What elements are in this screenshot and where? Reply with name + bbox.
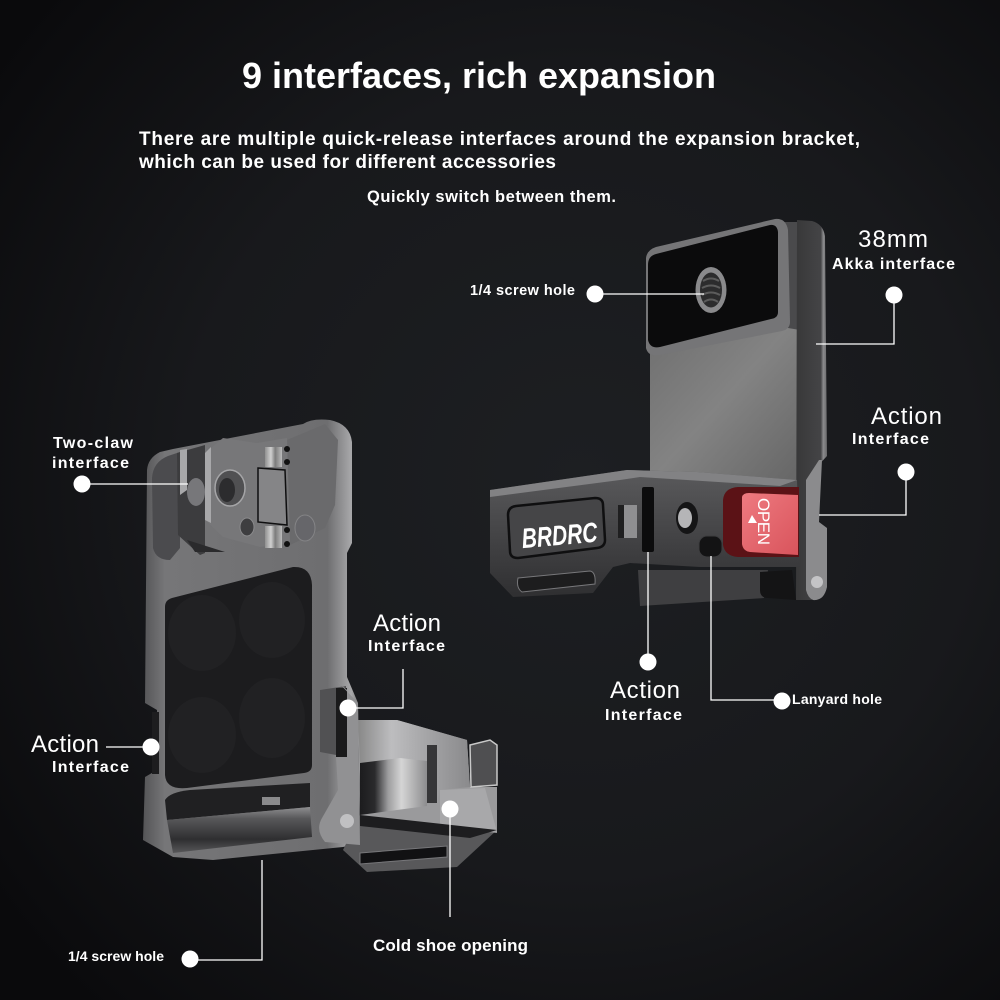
hex bolt bbox=[676, 502, 698, 534]
rail lower flange bbox=[806, 460, 827, 600]
callout: 38mm Akka interface bbox=[816, 226, 955, 344]
callout: Action Interface, left bbox=[31, 731, 160, 776]
callout: 1/4 screw hole, top: 1/4 screw hole bbox=[470, 283, 575, 299]
callout: Lanyard hole bbox=[711, 556, 882, 710]
right rail bbox=[796, 220, 827, 600]
callout: Action Interface, clamp: Interface bbox=[605, 707, 682, 724]
product: bracket rear view, right bbox=[490, 219, 827, 606]
callout: 38mm Akka interface: 38mm bbox=[858, 226, 928, 253]
callout: Action Interface, right: Interface bbox=[852, 431, 929, 448]
callout: Action Interface, middle: Interface bbox=[368, 638, 445, 655]
callout: Action Interface, left: Interface bbox=[52, 759, 129, 776]
clamp top edge bbox=[490, 470, 797, 497]
callout: Cold shoe opening bbox=[373, 800, 528, 955]
callout: Action Interface, middle bbox=[340, 610, 445, 716]
callout: Action Interface, right: Action bbox=[871, 403, 942, 430]
intro text bbox=[138, 129, 860, 206]
callout: 1/4 screw hole, bottom: 1/4 screw hole bbox=[68, 948, 164, 964]
callout: Two-claw interface: Two-claw bbox=[53, 435, 134, 452]
screw hole bbox=[696, 267, 726, 313]
callout: Two-claw interface bbox=[52, 435, 188, 492]
callout: 1/4 screw hole, top bbox=[470, 283, 704, 302]
intro text: There are multiple quick-release interfaces around the expansion bracket, bbox=[139, 129, 860, 150]
product: bracket front view, left bbox=[143, 420, 497, 872]
pivot pin bbox=[811, 576, 823, 588]
intro text: Quickly switch between them. bbox=[367, 188, 616, 206]
dark frame edge beside plate bbox=[778, 222, 800, 330]
black plate bbox=[648, 225, 778, 347]
hinge bbox=[258, 468, 287, 525]
clamp slots bbox=[518, 571, 595, 592]
callout: Cold shoe opening: Cold shoe opening bbox=[373, 936, 528, 955]
callout: Action Interface, right bbox=[819, 403, 942, 515]
title: 9 interfaces, rich expansion bbox=[242, 55, 716, 96]
grey body plate bbox=[650, 318, 797, 482]
upper cutout shading bbox=[152, 452, 180, 560]
clamp body bbox=[490, 470, 800, 597]
callout: Action Interface, clamp: Action bbox=[610, 677, 680, 704]
callout: 38mm Akka interface: Akka interface bbox=[832, 256, 955, 273]
lower base block bbox=[638, 570, 768, 606]
red OPEN latch bbox=[723, 487, 799, 557]
black plate frame bbox=[646, 219, 790, 355]
callout: Action Interface, middle: Action bbox=[373, 610, 441, 637]
lanyard hole bbox=[699, 536, 722, 557]
right notch, action interface bbox=[320, 686, 347, 757]
callout: Lanyard hole: Lanyard hole bbox=[792, 691, 882, 707]
pivot lobe bbox=[319, 680, 360, 845]
main frame bbox=[143, 420, 360, 860]
red OPEN latch: OPEN bbox=[754, 498, 773, 545]
callout: Two-claw interface: interface bbox=[52, 455, 129, 472]
lower cylinder bbox=[165, 783, 312, 853]
left notch bbox=[152, 712, 159, 774]
two-claw mount bbox=[177, 438, 315, 555]
lower shoe clamp bbox=[343, 815, 497, 872]
intro text: which can be used for different accessories bbox=[138, 152, 556, 173]
callout: Action Interface, left: Action bbox=[31, 731, 99, 758]
BRDRC logo plate bbox=[508, 498, 605, 558]
dark lens panel bbox=[165, 567, 312, 788]
callout: 1/4 screw hole, bottom bbox=[68, 860, 262, 968]
callout: Action Interface, clamp bbox=[605, 552, 682, 724]
BRDRC logo plate: BRDRC bbox=[520, 517, 599, 554]
